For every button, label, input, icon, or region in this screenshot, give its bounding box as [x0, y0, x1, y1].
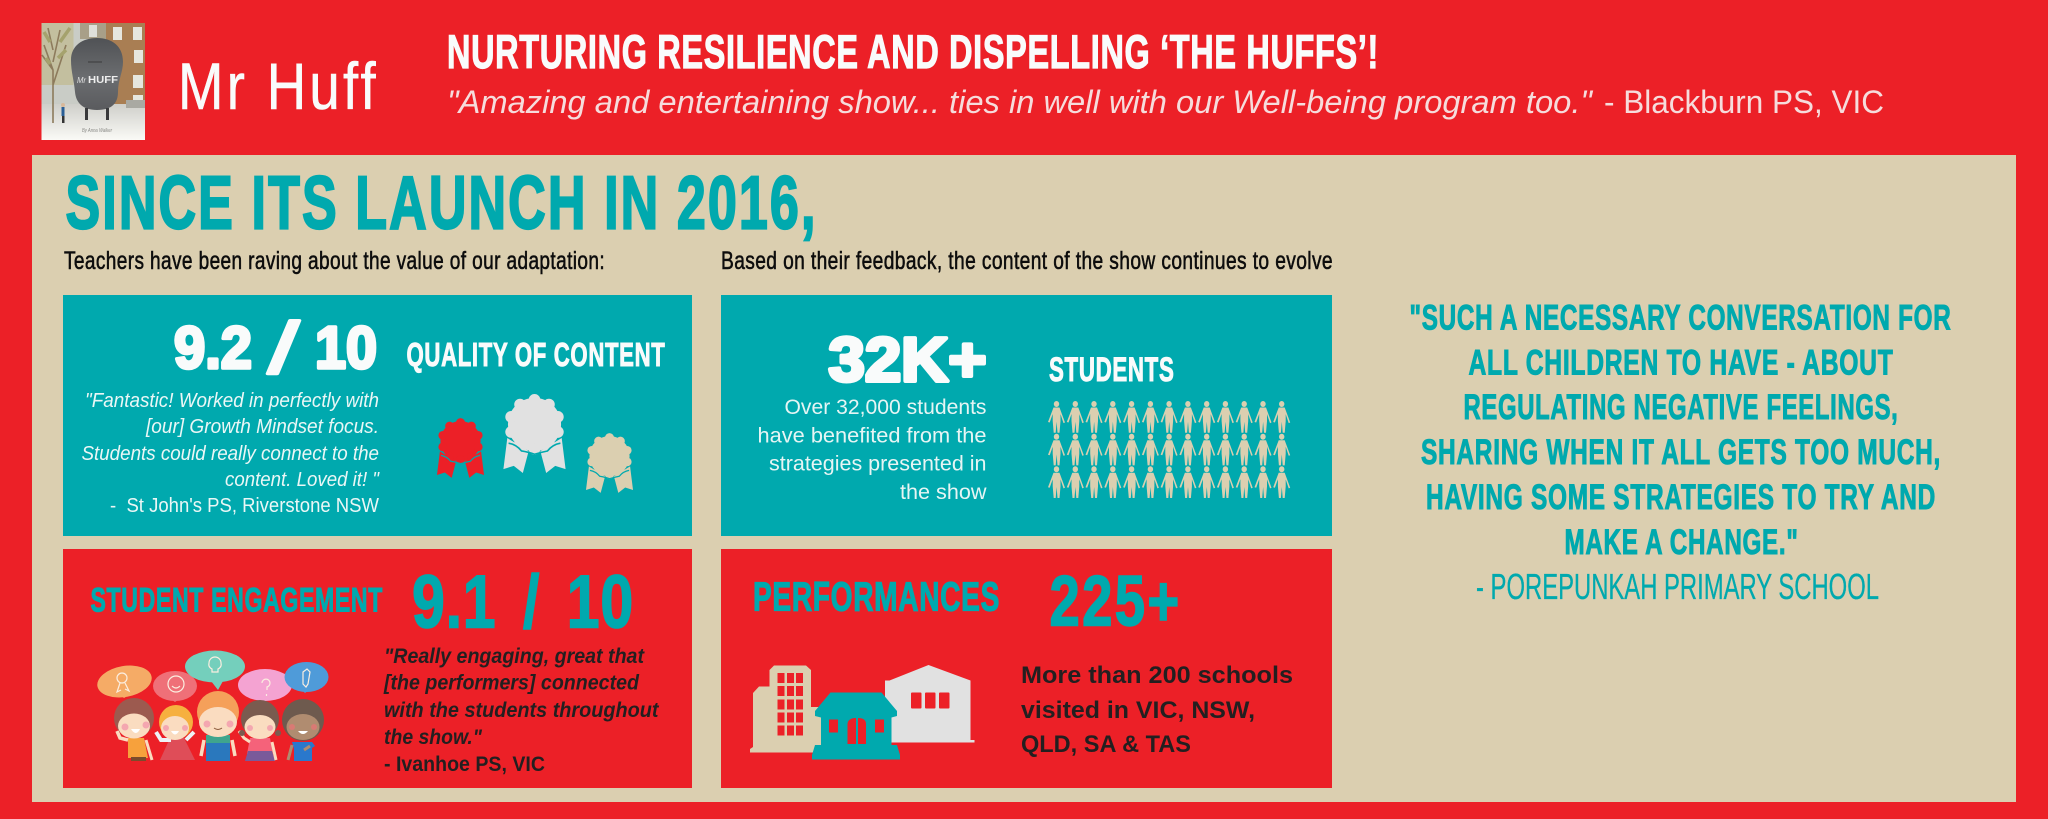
teacher quote: content. Loved it! " — [225, 469, 380, 491]
speech bubbles — [95, 650, 328, 702]
child 1 — [114, 698, 154, 761]
panel: quality of content — [63, 295, 692, 536]
description — [1021, 662, 1293, 758]
stat 225+: 225+ — [1050, 562, 1182, 642]
icon: school buildings — [750, 665, 974, 760]
teacher quote — [82, 390, 380, 517]
icon: teal school — [812, 692, 900, 760]
icons: award rosettes — [437, 394, 633, 493]
teacher quote: "Fantastic! Worked in perfectly with — [85, 390, 379, 412]
headline: NURTURING RESILIENCE AND DISPELLING ‘THE HUFFS’! — [447, 25, 1379, 78]
book cover: Mr Huff: HUFF — [88, 75, 118, 86]
teacher quote: [the performers] connected — [383, 672, 640, 694]
description: strategies presented in — [769, 452, 986, 476]
description: More than 200 schools — [1021, 662, 1293, 689]
testimonial quote: MAKE A CHANGE." — [1564, 523, 1798, 562]
teacher quote: "Really engaging, great that — [384, 645, 645, 668]
illustration: children with speech bubbles — [95, 650, 328, 761]
header band — [0, 0, 2048, 155]
description: visited in VIC, NSW, — [1021, 697, 1255, 724]
score 9.2 / 10 — [174, 309, 377, 389]
header quote: "Amazing and entertaining show... ties in well with our Well-being program too." — [447, 84, 1594, 120]
child 5 — [282, 699, 324, 761]
teacher quote: [our] Growth Mindset focus. — [145, 416, 379, 438]
score 9.2 / 10: 10 — [315, 315, 377, 381]
show title: Mr Huff — [178, 49, 379, 123]
description: Over 32,000 students — [784, 396, 986, 419]
stat 32K+: 32K+ — [828, 326, 986, 395]
teacher quote: the show." — [384, 726, 483, 749]
main heading: SINCE ITS LAUNCH IN 2016, — [66, 160, 818, 244]
label: students: STUDENTS — [1049, 351, 1174, 389]
panel: students — [721, 295, 1332, 536]
child 2 — [156, 705, 195, 760]
label: student engagement: STUDENT ENGAGEMENT — [90, 582, 383, 620]
child 4 — [239, 700, 281, 761]
score 9.1 / 10: 9.1 / 10 — [412, 560, 634, 644]
teacher quote: - St John's PS, Riverstone NSW — [110, 495, 379, 517]
left subheading: Teachers have been raving about the value of our adaptation: — [64, 247, 605, 275]
panel: student engagement — [63, 549, 692, 788]
description: QLD, SA & TAS — [1021, 731, 1191, 758]
description: have benefited from the — [758, 424, 986, 448]
teacher quote: with the students throughout — [384, 699, 659, 722]
child 3 — [197, 691, 239, 761]
description — [758, 396, 987, 504]
icon: grey building — [885, 665, 974, 742]
panel: performances — [721, 549, 1332, 788]
description: the show — [900, 481, 987, 504]
teacher quote: Students could really connect to the — [82, 443, 379, 465]
score 9.2 / 10: / — [268, 309, 299, 389]
label: quality of content: QUALITY OF CONTENT — [406, 336, 666, 373]
icon: beige tower — [750, 666, 830, 752]
score 9.2 / 10: 9.2 — [174, 315, 252, 381]
book cover: Mr Huff — [42, 23, 145, 140]
testimonial quote — [1410, 298, 1952, 607]
teacher quote — [383, 645, 659, 776]
main beige panel — [32, 155, 2016, 802]
label: performances: PERFORMANCES — [753, 574, 1000, 620]
book cover: Mr Huff: By Anna Walker — [82, 128, 113, 134]
middle subheading: Based on their feedback, the content of the show continues to evolve — [721, 247, 1333, 275]
header quote: - Blackburn PS, VIC — [1604, 84, 1884, 120]
teacher quote: - Ivanhoe PS, VIC — [384, 753, 545, 776]
book cover: Mr Huff: Mr — [77, 76, 86, 85]
icon grid: students — [1048, 401, 1290, 498]
